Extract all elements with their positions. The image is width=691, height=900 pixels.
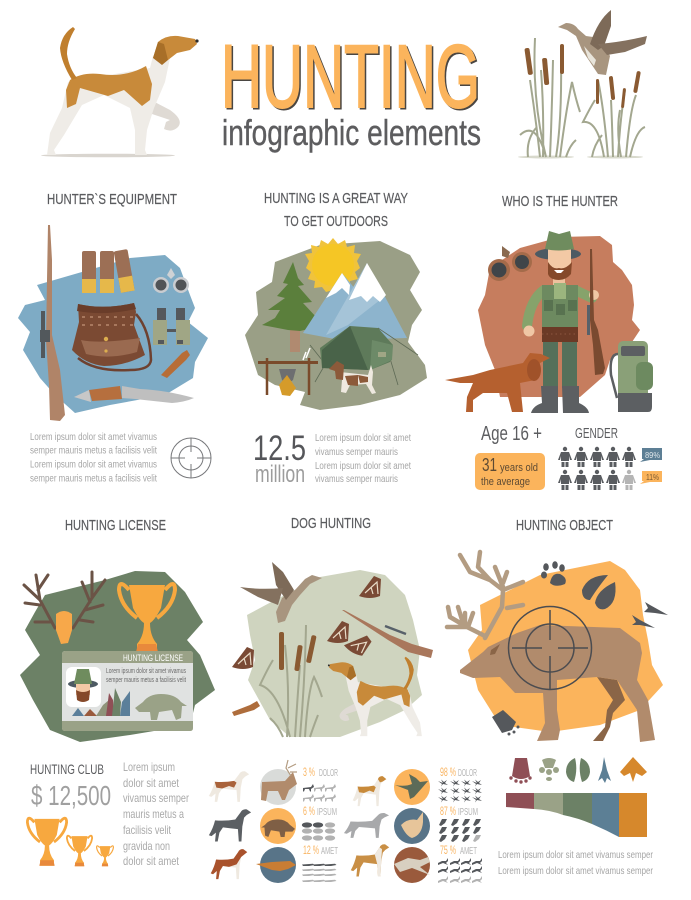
- icon: rifle: [40, 225, 65, 421]
- text block: Lorem ipsum: [123, 760, 175, 774]
- figure: hunter: [524, 231, 599, 413]
- section: who is the hunter: [445, 193, 662, 490]
- heading: gender: GENDER: [575, 425, 618, 442]
- stat: age: Age 16 +: [481, 423, 542, 445]
- icon: gold trophy: [119, 584, 175, 652]
- icon: flying duck: [240, 562, 322, 623]
- orange background blob: [468, 561, 663, 732]
- heading: outdoors: TO GET OUTDOORS: [284, 213, 388, 230]
- terracotta background blob: [478, 236, 640, 397]
- text block: semper mauris metus a facilisis velit: [30, 472, 157, 484]
- icon: hunter's rifle: [587, 249, 605, 375]
- stat labels: 3 %: [303, 767, 315, 779]
- title: infographic elements: [222, 112, 481, 153]
- license card: HUNTING LICENSE: [123, 653, 183, 663]
- pictogram grids: [302, 780, 482, 883]
- callout: 89%: [640, 448, 662, 462]
- stat labels: 75 %: [440, 845, 456, 857]
- icon: bird feet: [632, 602, 668, 628]
- icon: tent with ropes: [310, 326, 418, 385]
- figure: pointer dog: [328, 657, 422, 736]
- heading: hunter's equipment: HUNTER`S EQUIPMENT: [47, 191, 177, 208]
- icon: game call: [161, 350, 190, 378]
- title: HUNTING: [221, 26, 480, 126]
- license card: Lorem ipsum dolor sit amet vivamus: [106, 668, 186, 675]
- heading: hunting object: HUNTING OBJECT: [516, 517, 613, 534]
- heading: outdoors: [264, 190, 408, 230]
- callout: 11%: [640, 471, 662, 484]
- section: hunting club: [27, 760, 189, 868]
- text block: [315, 432, 411, 485]
- icon: fir tree: [262, 262, 326, 352]
- stat labels: 6 %: [303, 806, 315, 818]
- callout: average age: years old: [500, 462, 538, 474]
- title: [221, 26, 482, 153]
- text block: Lorem ipsum dolor sit amet: [315, 432, 411, 444]
- text block: vivamus semper mauris: [315, 446, 398, 458]
- boar silhouette: [135, 694, 187, 720]
- section: dog hunting: [232, 515, 433, 737]
- text block: [123, 760, 189, 868]
- gender pictogram: [558, 447, 636, 490]
- stat labels: IPSUM: [317, 806, 337, 818]
- section: hunter's equipment: [18, 191, 211, 484]
- icon: knife: [74, 386, 194, 403]
- track icon: hooves: [566, 758, 590, 782]
- text block: semper mauris metus a facilisis velit: [30, 444, 157, 456]
- text block: Lorem ipsum dolor sit amet: [315, 460, 411, 472]
- text block: Lorem ipsum dolor sit amet vivamus: [30, 431, 157, 443]
- icon: sun: [305, 238, 361, 292]
- game circle: fox: [256, 847, 296, 883]
- text block: [498, 849, 653, 877]
- callout: average age: [475, 453, 545, 490]
- track icon: bird foot: [598, 757, 611, 783]
- text block: [30, 431, 157, 484]
- icon: duck footprints: [232, 576, 381, 669]
- sage background blob: [247, 570, 422, 737]
- text block: vivamus semper: [123, 791, 189, 805]
- section: dogs and game statistics: [209, 760, 482, 883]
- blue background blob: [18, 255, 208, 413]
- icon: antlers trophy: [24, 572, 105, 644]
- game circle: boar: [260, 808, 296, 844]
- text block: facilisis velit: [123, 823, 171, 837]
- olive background blob: [245, 241, 427, 410]
- stat labels: DOLOR: [319, 767, 338, 779]
- stacked funnel bar: [506, 793, 647, 837]
- section: animal tracks chart: [498, 757, 653, 877]
- text block: Lorem ipsum dolor sit amet vivamus: [30, 458, 157, 470]
- license card: [62, 651, 193, 731]
- text block: dolor sit amet: [123, 776, 180, 790]
- figure: elk with antlers: [447, 552, 655, 742]
- icon: campfire with pot: [258, 348, 318, 396]
- icon: binoculars: [153, 308, 190, 345]
- stat labels: IPSUM: [458, 806, 478, 818]
- stat labels: DOLOR: [458, 767, 477, 779]
- small dog silhouettes: [209, 771, 389, 879]
- license card: semper mauris metus a facilisis velit: [106, 677, 186, 684]
- section: hunting license: [20, 517, 215, 742]
- track icon: paw: [539, 758, 559, 781]
- text block: mauris metus a: [123, 807, 184, 821]
- icon: reeds: [260, 625, 322, 737]
- game circle: duck: [394, 769, 430, 805]
- game circle: hare: [394, 847, 430, 883]
- icon: three trophies: [27, 818, 113, 866]
- track icon: webbed foot: [620, 757, 647, 782]
- icon: leather bag: [72, 303, 151, 370]
- stat labels: [303, 767, 478, 857]
- stat labels: 12 %: [303, 845, 319, 857]
- heading: dog hunting: DOG HUNTING: [291, 515, 371, 532]
- icon: game call: [232, 701, 260, 716]
- portrait: [66, 667, 101, 707]
- heading: outdoors: HUNTING IS A GREAT WAY: [264, 190, 408, 207]
- callout: 89%: 89%: [645, 450, 660, 460]
- icon: rifle: [342, 610, 433, 658]
- stat labels: 98 %: [440, 767, 456, 779]
- text block: gravida non: [123, 839, 170, 853]
- stat labels: AMET: [460, 845, 477, 857]
- heading: hunting club: HUNTING CLUB: [30, 761, 104, 777]
- icon: paw print: [541, 561, 566, 586]
- game circle: deer: [260, 760, 297, 805]
- icon: basset dog: [329, 361, 376, 394]
- track icon: bear: [509, 758, 532, 784]
- stat: 12.5 million: million: [255, 461, 305, 488]
- section: hunting outdoors: [245, 190, 427, 488]
- section: hunting object: [447, 517, 668, 742]
- callout: average age: the average: [481, 476, 530, 488]
- stat labels: AMET: [321, 845, 338, 857]
- header dog illustration: [41, 27, 199, 157]
- game circle: partridge: [394, 808, 430, 844]
- stat: prize: $ 12,500: [31, 780, 111, 811]
- heading: who is the hunter: WHO IS THE HUNTER: [502, 193, 618, 210]
- icon: backpack: [611, 341, 653, 412]
- header reeds and flying duck: [518, 10, 647, 158]
- reticle: [508, 606, 592, 690]
- text block: vivamus semper mauris: [315, 473, 398, 485]
- icon: hoof prints: [582, 575, 616, 609]
- callout: average age: 31: [482, 455, 497, 475]
- figure: spaniel dog: [445, 353, 550, 412]
- green background blob: [20, 571, 215, 742]
- stat labels: 87 %: [440, 806, 456, 818]
- heading: hunting license: HUNTING LICENSE: [65, 517, 166, 534]
- text block: dolor sit amet: [123, 854, 180, 868]
- icon: bear print: [492, 710, 520, 736]
- icon: mountains: [303, 263, 407, 340]
- callout: 11%: 11%: [646, 472, 659, 482]
- icon: crosshair: [171, 438, 211, 478]
- stat: 12.5 million: [253, 429, 306, 488]
- icon: binoculars: [488, 246, 532, 281]
- mini area chart: [72, 688, 130, 716]
- icon: shotgun shells: [82, 249, 135, 293]
- stat: 12.5 million: 12.5: [253, 429, 306, 468]
- title: HUNTING: [222, 28, 482, 128]
- icon: goggles: [153, 268, 189, 293]
